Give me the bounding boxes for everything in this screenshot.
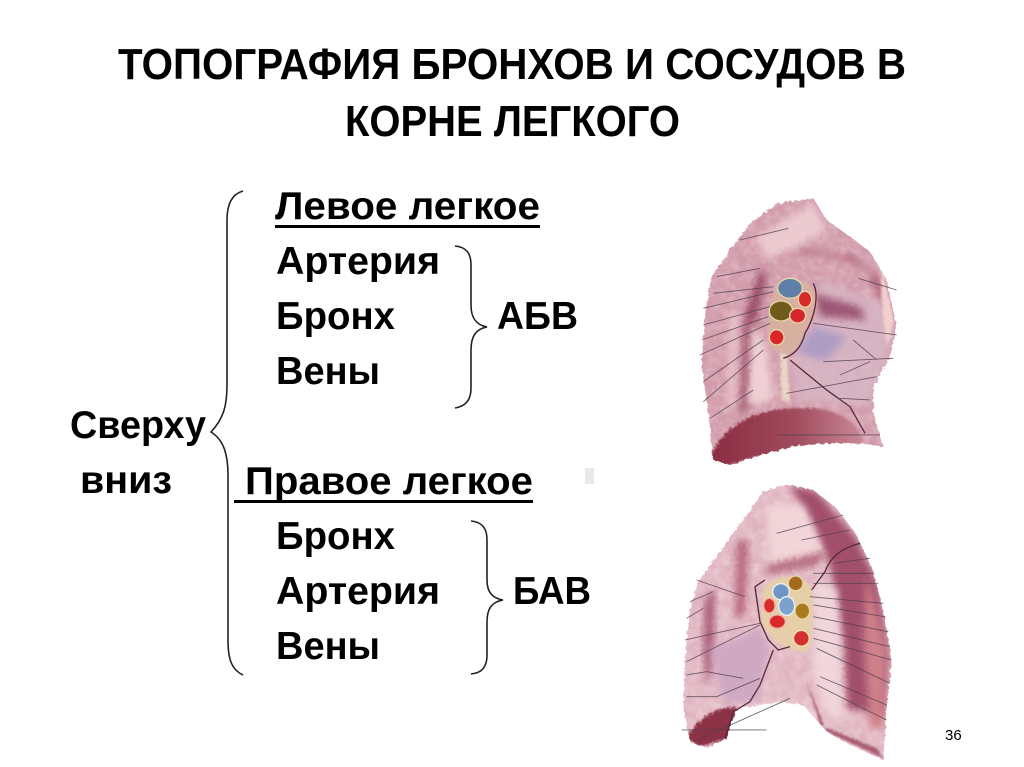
left lung text block: Артерия	[276, 240, 440, 283]
left label: from top to bottom: Сверху	[70, 404, 206, 447]
vessel: bronchus blue	[778, 278, 802, 298]
hilum of right lung	[725, 543, 860, 738]
vessel: red lower	[769, 615, 785, 628]
right lung text block: Артерия	[276, 570, 440, 613]
page number: 36	[945, 727, 962, 744]
vessel: artery red	[790, 308, 806, 323]
small image artifact	[585, 468, 594, 484]
vessel: brown top	[788, 576, 803, 591]
large curly brace	[211, 191, 243, 675]
title: ТОПОГРАФИЯ БРОНХОВ И СОСУДОВ В	[118, 40, 906, 89]
right lung text block: Вены	[276, 625, 380, 668]
illustration: left lung	[700, 197, 897, 465]
hilum of left lung	[767, 278, 817, 358]
left lung text block	[275, 185, 540, 393]
label: ABV: АБВ	[497, 295, 578, 338]
label lines	[682, 515, 892, 742]
left lung text block: Бронх	[276, 295, 395, 338]
vessel: lower red	[769, 330, 784, 345]
vessel: red left	[764, 598, 775, 613]
left lung text block: Левое легкое	[275, 185, 540, 228]
vessel: red bottom	[793, 630, 809, 646]
brace: right lung order	[471, 521, 503, 674]
vessel: vein red	[798, 291, 812, 307]
right lung text block	[234, 460, 533, 668]
label: BAV: БАВ	[513, 570, 591, 613]
vessel: bronchus blue lower	[779, 597, 795, 615]
right lung text block: Бронх	[276, 515, 395, 558]
left label: from top to bottom: вниз	[80, 459, 172, 502]
vessel: olive	[769, 301, 793, 321]
left label: from top to bottom	[70, 404, 206, 502]
vessel: brown lower	[795, 603, 810, 619]
vessel: bronchus blue upper	[773, 584, 789, 600]
left lung text block: Вены	[276, 350, 380, 393]
illustration: right lung	[682, 484, 892, 760]
right lung text block: Правое легкое	[245, 460, 533, 503]
title	[118, 40, 906, 146]
title: КОРНЕ ЛЕГКОГО	[345, 97, 680, 146]
brace: left lung order	[455, 246, 487, 408]
label lines	[700, 228, 897, 435]
